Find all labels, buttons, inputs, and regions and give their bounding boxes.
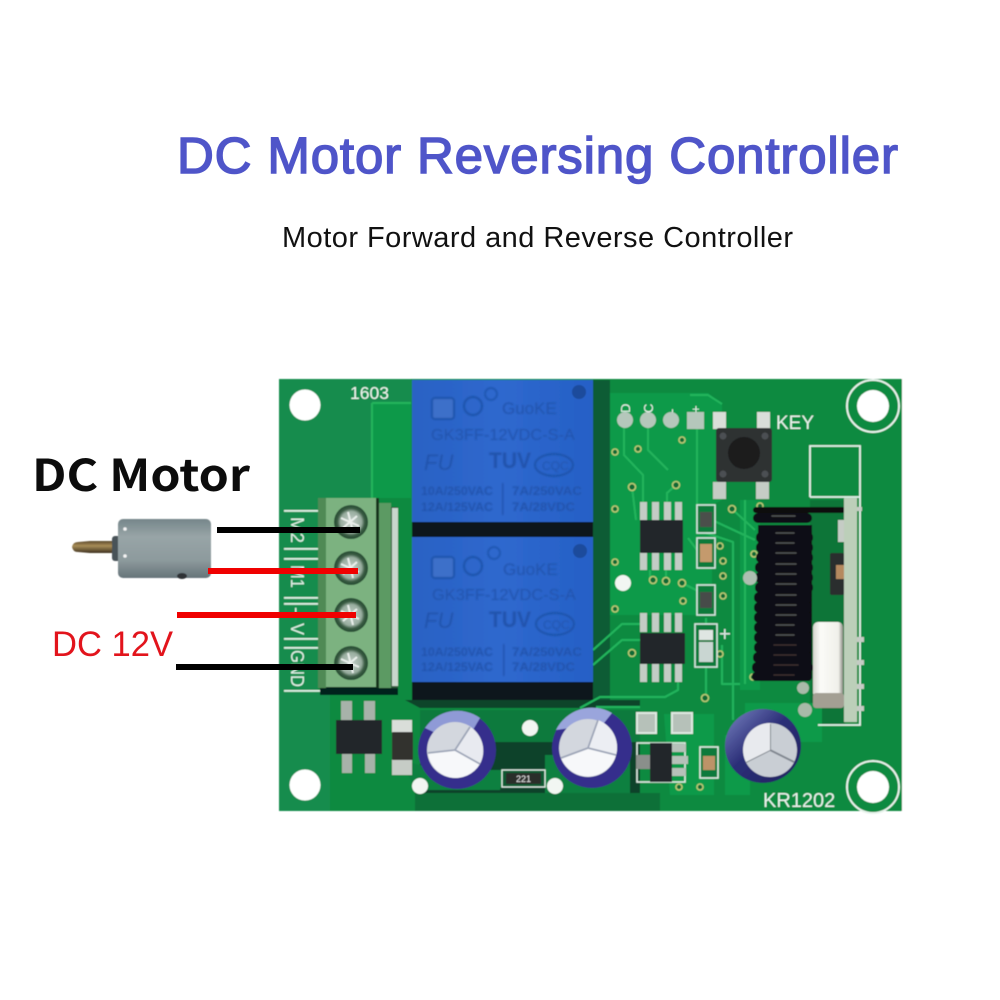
- relay 2: 10A/250VAC: [421, 645, 493, 659]
- header pads: +: [688, 405, 703, 413]
- relay 1: GuoKE: [502, 399, 557, 418]
- header pads: C: [641, 404, 656, 413]
- mounting hole: top right: [847, 380, 899, 432]
- mounting hole: bottom left: [290, 770, 320, 800]
- label: DC 12V: DC 12V: [52, 625, 174, 664]
- relay 1: FU: [424, 450, 453, 475]
- copper region: left column: [279, 379, 411, 811]
- silkscreen: terminal labels: [284, 510, 322, 692]
- relay 2: 7A/250VAC: [512, 645, 582, 659]
- relay 2: 12A/125VAC: [421, 660, 493, 674]
- vias: [612, 437, 763, 790]
- relay 1: GK3FF-12VDC-S-A: [431, 427, 576, 444]
- circuit board: [279, 375, 916, 815]
- relay 1: [412, 380, 593, 538]
- relay 1: 7A/28VDC: [512, 500, 575, 514]
- relay 2: CQC: [543, 618, 570, 632]
- resistor 221: 221: [516, 774, 531, 784]
- header pads: -: [664, 409, 679, 413]
- silkscreen: KEY: KEY: [776, 413, 814, 434]
- silkscreen: KR1202: KR1202: [763, 790, 835, 812]
- crystal: [813, 622, 844, 708]
- relay 1: 12A/125VAC: [421, 500, 493, 514]
- silkscreen: terminal labels: -V: [287, 607, 307, 635]
- relay 1: TUV: [489, 448, 531, 473]
- screw 3: [334, 598, 368, 632]
- chip 2: [640, 613, 685, 682]
- screw 2: [334, 551, 368, 585]
- mounting hole: top left: [290, 390, 320, 420]
- relay 2: 7A/28VDC: [512, 660, 575, 674]
- wire: supply black: [176, 664, 353, 670]
- copper region: top right: [610, 393, 722, 615]
- board base: [279, 379, 902, 811]
- relay 1: CQC: [542, 459, 569, 473]
- resistor near capacitor: [700, 747, 718, 778]
- relay 1: 10A/250VAC: [421, 484, 493, 498]
- capacitor 1: [418, 711, 496, 789]
- screw 1: [334, 505, 368, 539]
- wire: motor black: [217, 527, 360, 533]
- resistor 221: [502, 770, 545, 787]
- mounting hole: bottom right: [847, 761, 899, 813]
- antenna coil: [752, 510, 842, 681]
- header pads: [617, 404, 704, 429]
- relay 2: FU: [424, 608, 453, 633]
- subtitle: Motor Forward and Reverse Controller: [282, 222, 793, 254]
- bridge rectifier: [336, 701, 382, 773]
- wire: motor red: [208, 568, 358, 574]
- small white holes: [412, 575, 631, 794]
- transistor and pads: [636, 713, 692, 782]
- icon: DC motor: [72, 519, 211, 579]
- silkscreen: terminal labels: M2: [287, 517, 307, 543]
- chip 1: [640, 502, 683, 570]
- circuit traces: [372, 395, 755, 720]
- wire: supply red: [177, 612, 356, 618]
- relay 1: 7A/250VAC: [512, 484, 582, 498]
- relay 2: [412, 537, 593, 700]
- dark copper behind coil: [810, 500, 845, 725]
- relay 2: GuoKE: [503, 560, 558, 579]
- receiver module: [743, 498, 864, 722]
- silkscreen: terminal labels: M1: [287, 565, 307, 588]
- title: DC Motor Reversing Controller: [177, 127, 898, 184]
- header pads: D: [618, 404, 633, 413]
- push button: [713, 412, 772, 499]
- relay 2: TUV: [489, 607, 531, 632]
- capacitor 2: [552, 708, 632, 788]
- SMD parts: [695, 505, 730, 667]
- screw 4: [334, 646, 368, 680]
- dark copper area under relays: [593, 380, 610, 700]
- silkscreen outline: receiver module: [810, 446, 860, 725]
- label: DC Motor: DC Motor: [32, 440, 251, 504]
- capacitor 3: [725, 709, 801, 783]
- silkscreen: 1603: 1603: [350, 383, 389, 403]
- diode: [392, 720, 413, 775]
- terminal block: [318, 498, 398, 695]
- relay 2: GK3FF-12VDC-S-A: [432, 587, 577, 604]
- silkscreen: terminal labels: GND: [287, 650, 307, 687]
